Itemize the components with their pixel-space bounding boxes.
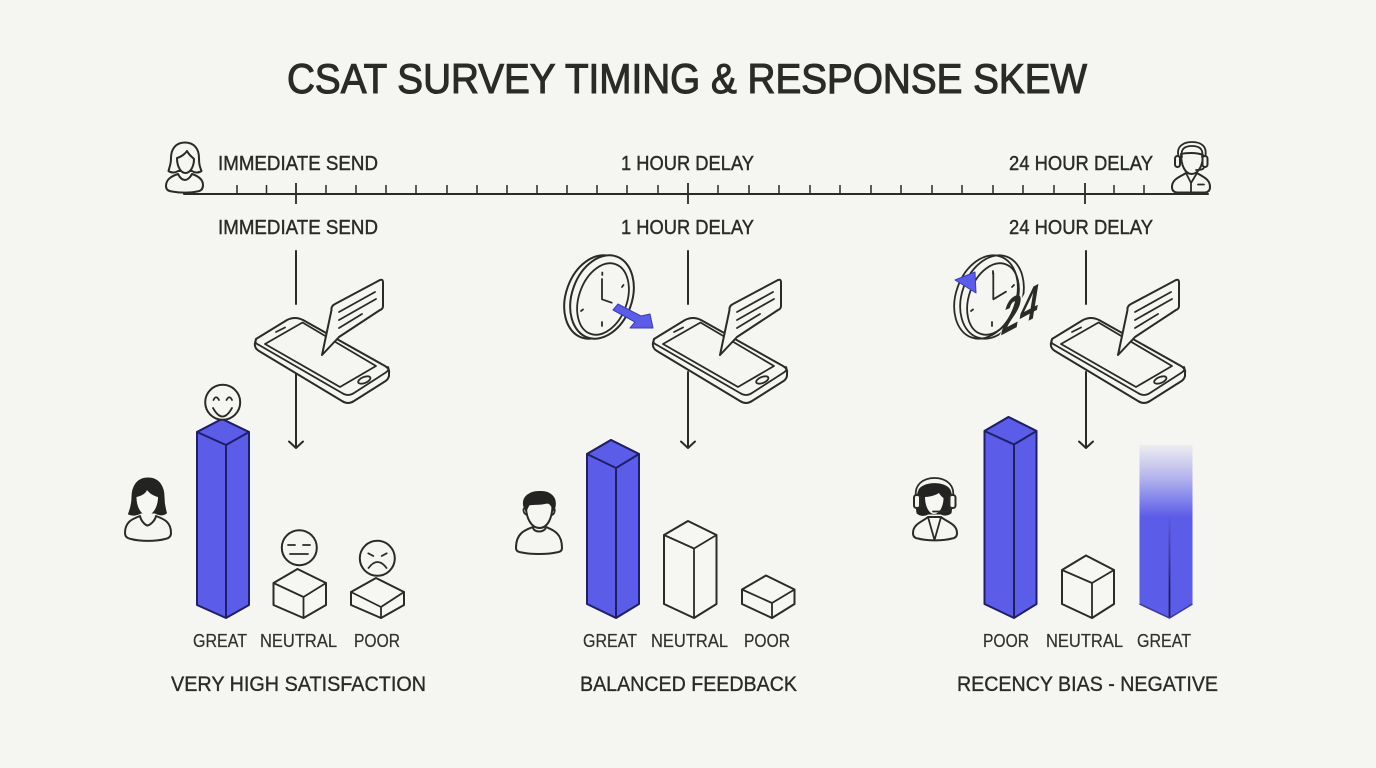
label: poor: POOR: [354, 631, 400, 651]
bar: great fading: [1140, 445, 1192, 618]
bar: neutral: [664, 521, 716, 618]
label: neutral: NEUTRAL: [260, 631, 337, 651]
label: poor: POOR: [983, 631, 1029, 651]
icon: phone with speech bubble 1 hour: [653, 280, 787, 403]
icon: neutral face: [282, 530, 317, 565]
icon: woman: [125, 478, 171, 541]
label: timeline immediate send: IMMEDIATE SEND: [218, 153, 378, 175]
title: CSAT SURVEY TIMING & RESPONSE SKEW: [287, 55, 1087, 102]
label: great: GREAT: [583, 631, 637, 651]
icon: happy face: [205, 385, 240, 420]
bar: great: [197, 419, 249, 618]
bar chart: immediate send: [197, 419, 404, 618]
label: timeline 1 hour delay: 1 HOUR DELAY: [621, 153, 754, 175]
label: stage immediate send: IMMEDIATE SEND: [218, 217, 378, 239]
bar: poor: [742, 576, 794, 618]
icon: clock with 24: 24: [998, 271, 1044, 347]
panel: immediate send: [125, 251, 426, 696]
icon: sad face: [360, 541, 395, 576]
arrow: survey flow 1 hour: [681, 251, 695, 448]
label: neutral: NEUTRAL: [651, 631, 728, 651]
arrow: survey flow immediate: [289, 251, 303, 448]
label: timeline 24 hour delay: 24 HOUR DELAY: [1009, 153, 1153, 175]
panel: 24 hour delay: [913, 246, 1218, 696]
icon: support agent on timeline: [1172, 142, 1210, 192]
caption: balanced feedback: BALANCED FEEDBACK: [580, 672, 798, 696]
label: neutral: NEUTRAL: [1046, 631, 1123, 651]
panel: 1 hour delay: [516, 246, 798, 696]
label: stage 24 hour delay: 24 HOUR DELAY: [1009, 217, 1153, 239]
icon: man: [516, 491, 562, 554]
icon: customer on timeline: [166, 142, 203, 193]
icon: clock with 24: [943, 246, 1044, 348]
icon: clock with arrow: [553, 246, 653, 348]
label: great: GREAT: [1137, 631, 1191, 651]
timeline major ticks: [296, 183, 1085, 204]
label: stage 1 hour delay: 1 HOUR DELAY: [621, 217, 754, 239]
timeline axis: [184, 193, 1208, 195]
caption: very high satisfaction: VERY HIGH SATISFACTION: [171, 672, 426, 696]
timeline: [184, 183, 1208, 204]
bar: poor: [351, 578, 404, 618]
bar: poor: [984, 417, 1036, 618]
bar: neutral: [1062, 556, 1114, 618]
timeline ticks: [237, 185, 1144, 194]
bar: great: [587, 440, 639, 618]
bar chart: 24 hour delay: [984, 417, 1192, 618]
bar chart: 1 hour delay: [587, 440, 794, 618]
icon: support agent: [913, 478, 957, 540]
caption: recency bias negative: RECENCY BIAS - NEGATIVE: [957, 672, 1218, 696]
icon: phone with speech bubble 24 hour: [1051, 280, 1185, 403]
label: great: GREAT: [193, 631, 247, 651]
arrow: survey flow 24 hour: [1079, 251, 1093, 448]
bar: neutral: [274, 569, 326, 618]
icon: phone with speech bubble immediate: [255, 280, 389, 403]
label: poor: POOR: [744, 631, 790, 651]
